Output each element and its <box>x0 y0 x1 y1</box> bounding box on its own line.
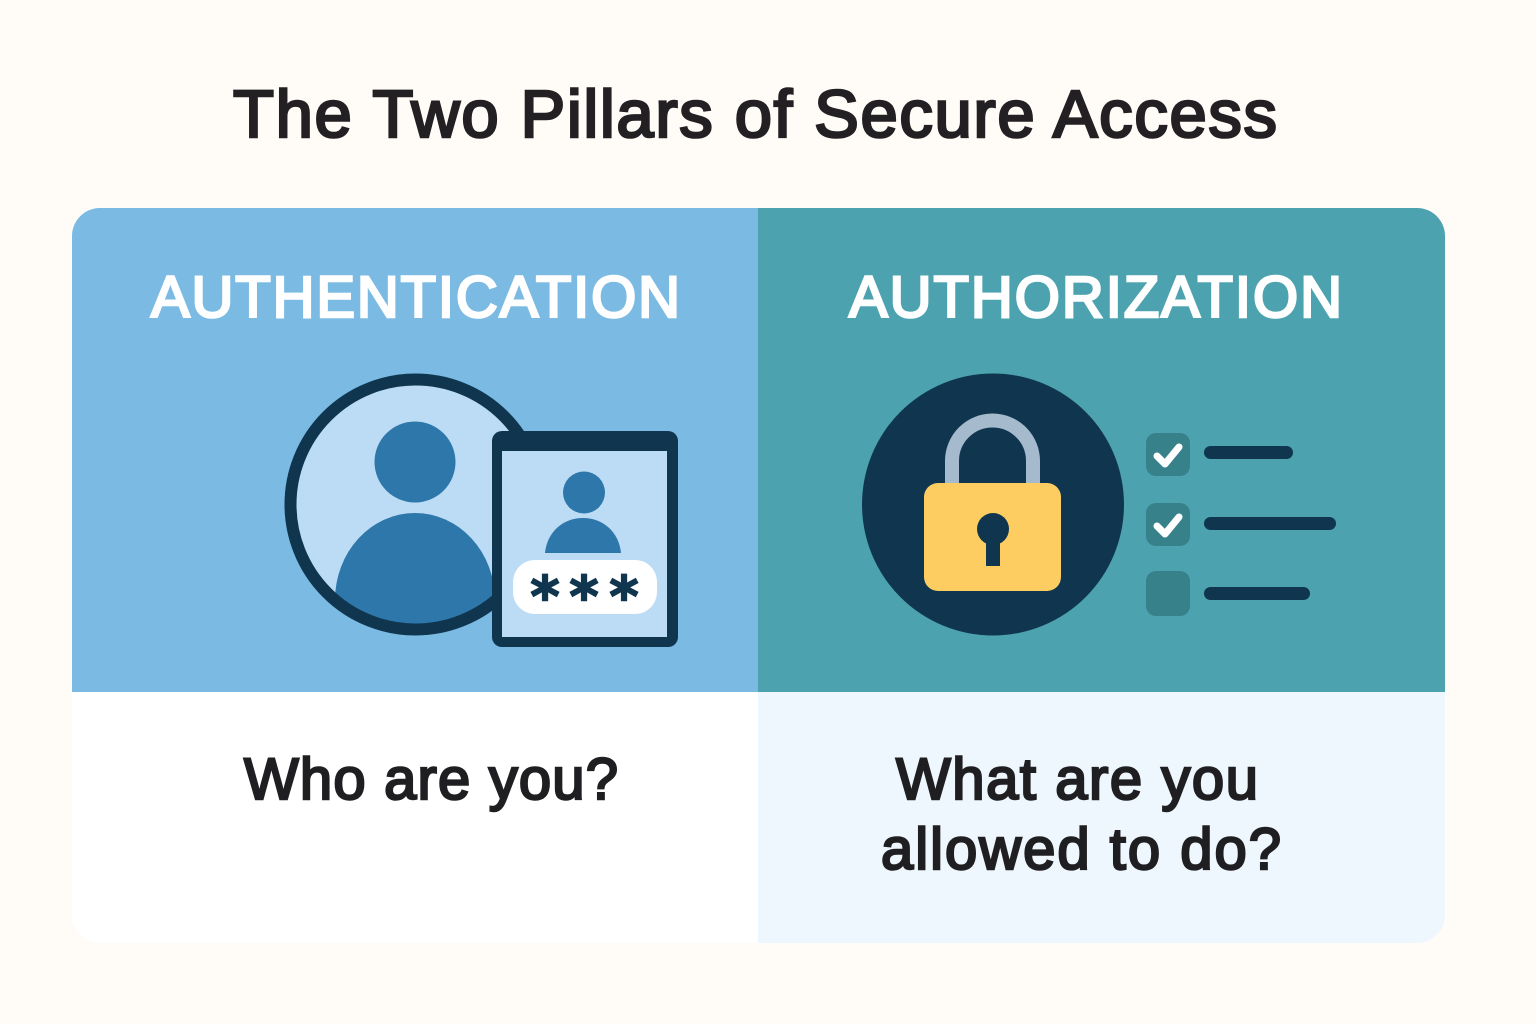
panel: authentication header <box>72 208 758 692</box>
panel: authorization question <box>758 692 1445 943</box>
password field: * <box>569 565 599 630</box>
heading: authentication: AUTHENTICATION <box>151 265 680 330</box>
panel: authentication question <box>72 692 758 943</box>
checklist <box>1146 433 1336 616</box>
text: what are you allowed to do: What are you <box>896 747 1258 812</box>
checklist item 2 <box>1146 503 1336 546</box>
checklist item 3 <box>1146 571 1310 616</box>
password field <box>513 560 657 630</box>
password field: * <box>609 565 639 630</box>
password field: * <box>530 565 560 630</box>
comparison card <box>72 208 1445 943</box>
text: what are you allowed to do: allowed to do? <box>881 817 1281 882</box>
icon: login tablet <box>492 431 678 647</box>
icon: padlock <box>862 374 1124 636</box>
text: who are you: Who are you? <box>244 747 618 812</box>
text: what are you allowed to do <box>881 747 1281 882</box>
heading: authorization: AUTHORIZATION <box>849 265 1342 330</box>
infographic <box>72 87 1445 943</box>
title: The Two Pillars of Secure Access <box>233 77 1277 152</box>
panel: authorization header <box>758 208 1445 692</box>
checklist item 1 <box>1146 433 1293 476</box>
icon: user profile circle <box>284 374 524 636</box>
